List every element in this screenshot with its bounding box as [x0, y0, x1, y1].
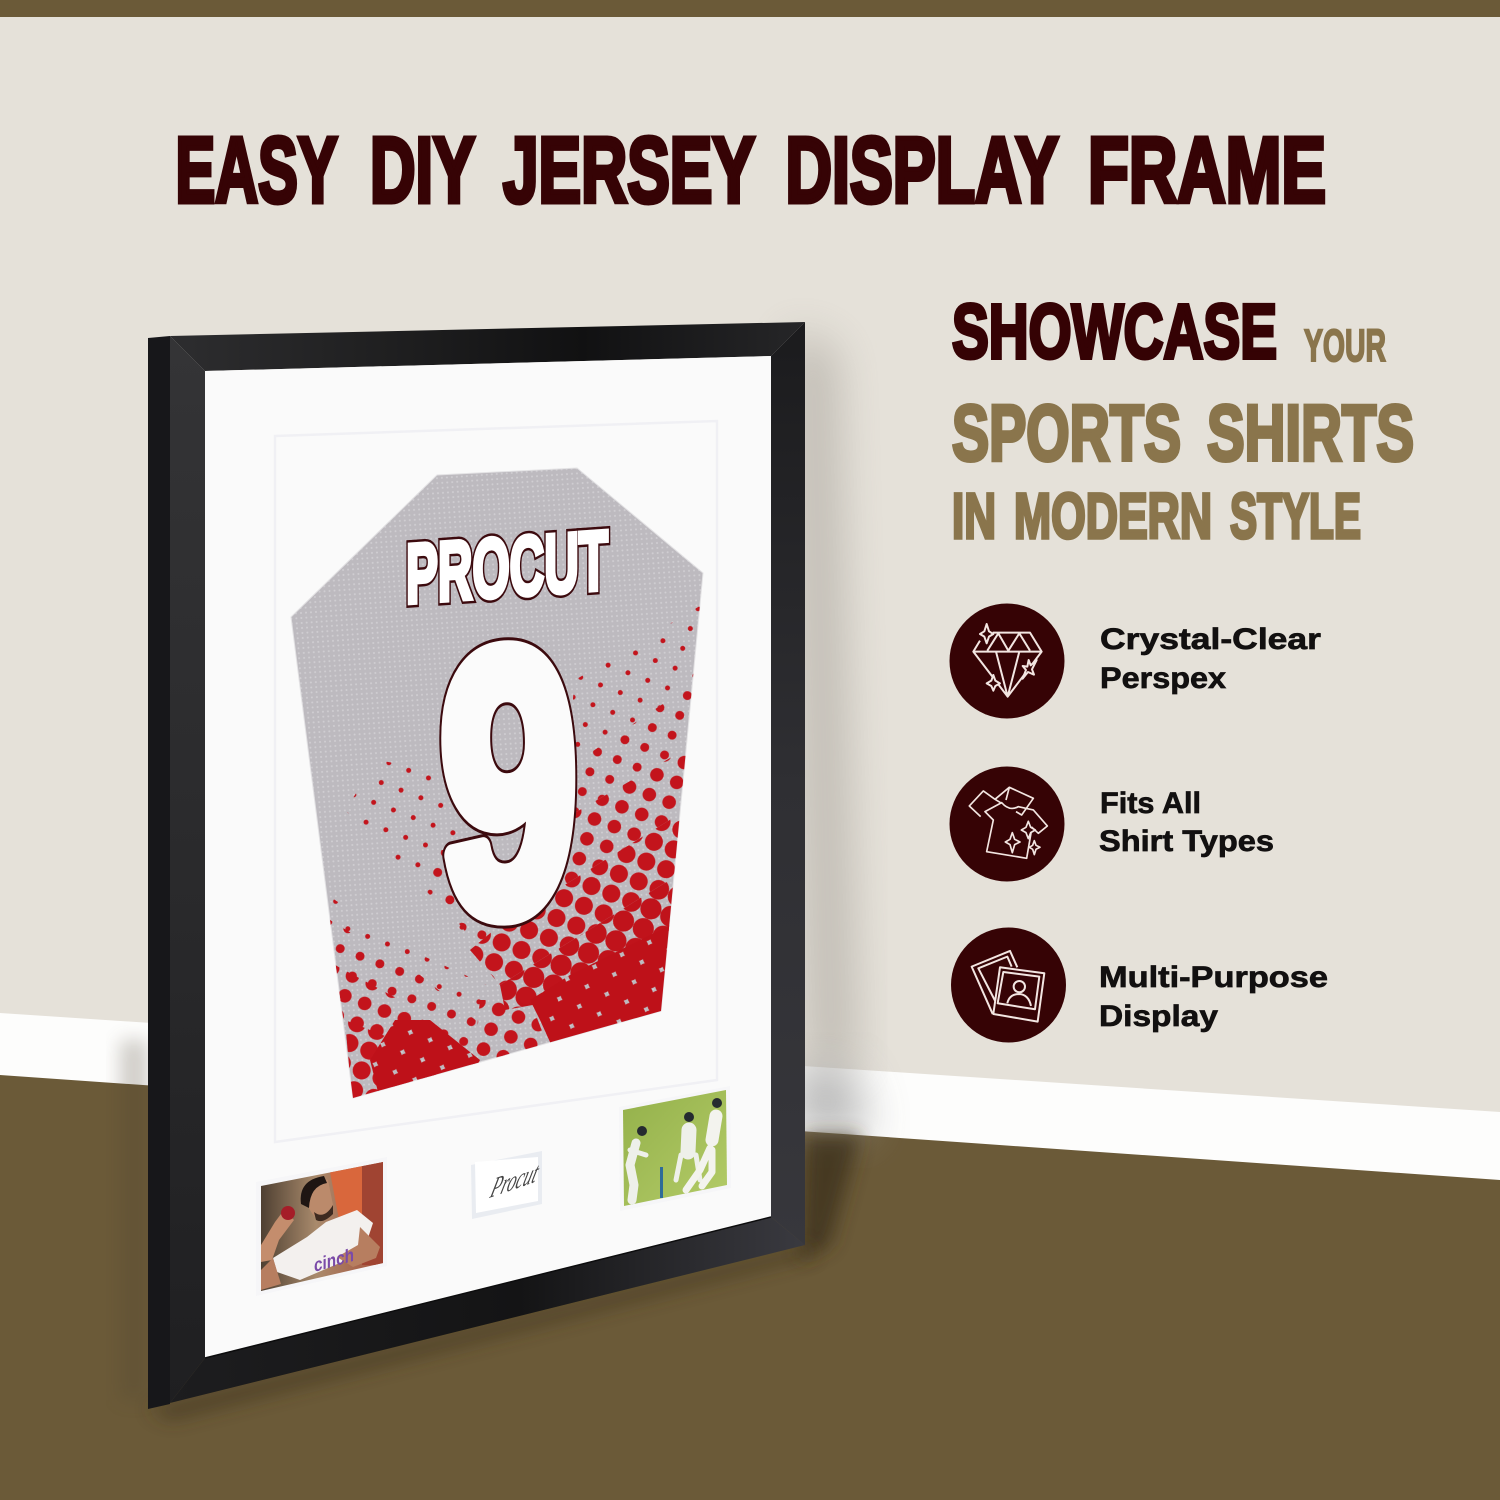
signature card [471, 1151, 544, 1219]
jersey name: PROCUT [406, 513, 608, 621]
title: DISPLAY [786, 118, 1058, 222]
line three [952, 480, 1361, 552]
feature: crystal-clear perspex [950, 604, 1321, 718]
sponsor logo: cinch [314, 1244, 354, 1277]
title: FRAME [1088, 118, 1326, 222]
signature card: Procut [486, 1155, 544, 1205]
batter [686, 1116, 716, 1190]
feature label: Multi-Purpose [1099, 961, 1328, 994]
frame outer side [148, 336, 170, 1409]
feature: fits all shirt types [950, 766, 1274, 882]
floor [0, 1075, 1500, 1500]
arm and ball [261, 1210, 294, 1262]
white mount board [205, 356, 771, 1358]
frame top bar [170, 322, 805, 371]
line one dark: SHOWCASE [952, 289, 1277, 375]
feature label [1099, 787, 1274, 858]
jersey number: 9 [440, 573, 577, 991]
title: EASY [176, 118, 338, 222]
heading: showcase your sports shirts [952, 289, 1414, 552]
frame right bar [771, 322, 805, 1245]
skirting board [0, 1013, 1500, 1182]
feature label: Fits All [1100, 787, 1201, 820]
photo: batsmen [623, 1090, 727, 1206]
picture frame [148, 322, 805, 1409]
wicketkeeper [630, 1143, 646, 1200]
feature label: Display [1099, 1000, 1218, 1033]
feature label [1100, 623, 1321, 695]
title: DIY [370, 118, 475, 222]
title [176, 118, 1326, 222]
jersey name [406, 513, 608, 621]
feature label: Crystal-Clear [1100, 623, 1321, 656]
feature label [1099, 961, 1328, 1033]
line two: SHIRTS [1207, 388, 1414, 477]
jersey name: PROCUT [406, 513, 608, 621]
red halftone pattern [320, 600, 710, 1100]
top band [0, 0, 1500, 17]
frame shadow [120, 330, 870, 1420]
feature label: Shirt Types [1099, 825, 1274, 858]
jersey number: 9 [440, 573, 577, 991]
feature: multi-purpose display [951, 928, 1328, 1042]
icon: photos [951, 928, 1066, 1042]
icon: diamond [950, 604, 1064, 718]
frame bottom bar [170, 1217, 805, 1403]
line three: MODERN [1014, 480, 1212, 552]
photo: bowler [261, 1162, 383, 1291]
line three: IN [952, 480, 996, 552]
icon: shirts [950, 766, 1064, 882]
jersey [291, 468, 710, 1100]
stumps [660, 1167, 663, 1198]
jersey fabric [291, 468, 703, 1098]
frame left bar [170, 336, 205, 1403]
feature label: Perspex [1100, 662, 1226, 695]
head [309, 1180, 333, 1216]
line one small: YOUR [1304, 320, 1386, 371]
mount inner shadow [205, 1217, 771, 1358]
title: JERSEY [503, 118, 755, 222]
line three: STYLE [1230, 480, 1361, 552]
fielder [676, 1130, 700, 1180]
line two: SPORTS [952, 388, 1181, 477]
white shirt [273, 1210, 373, 1280]
jersey window bevel [275, 421, 717, 1142]
